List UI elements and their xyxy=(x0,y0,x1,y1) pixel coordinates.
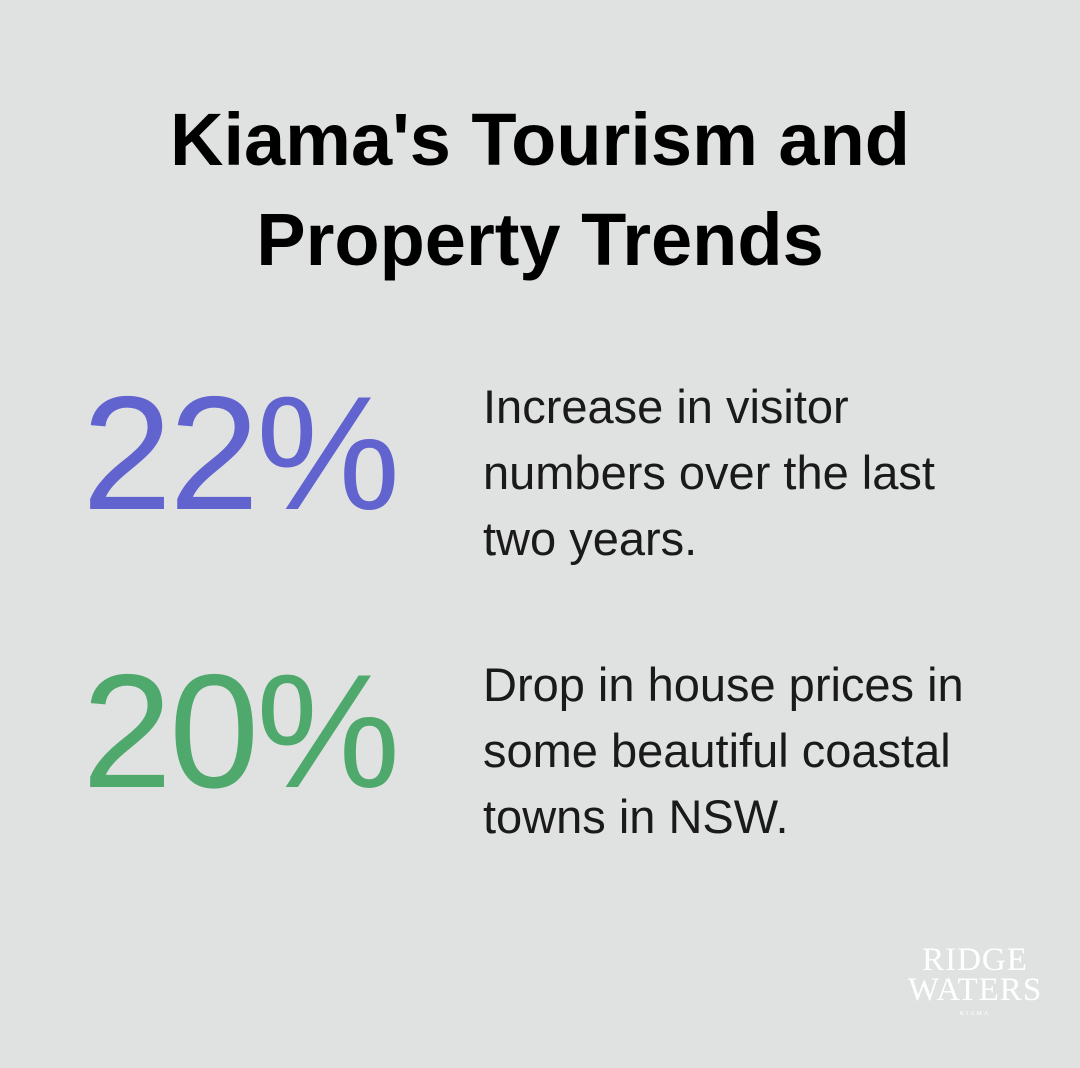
text: price drop xyxy=(483,658,964,843)
text: visitor increase: Increase in visitor xyxy=(483,380,849,433)
stat: 22%: 22% xyxy=(82,363,397,544)
text: visitor increase xyxy=(483,380,935,565)
text: visitor increase: numbers over the last xyxy=(483,446,935,499)
text: visitor increase: two years. xyxy=(483,512,697,565)
stat: 20%: 20% xyxy=(82,641,397,822)
logo: KIAMA xyxy=(960,1011,990,1017)
title: Property Trends xyxy=(256,198,824,281)
logo xyxy=(908,942,1042,1017)
logo: RIDGE xyxy=(922,942,1028,978)
text: price drop: some beautiful coastal xyxy=(483,724,951,777)
logo: WATERS xyxy=(908,972,1042,1008)
title xyxy=(170,98,910,281)
text: price drop: Drop in house prices in xyxy=(483,658,964,711)
text: price drop: towns in NSW. xyxy=(483,790,789,843)
title: Kiama's Tourism and xyxy=(170,98,910,181)
